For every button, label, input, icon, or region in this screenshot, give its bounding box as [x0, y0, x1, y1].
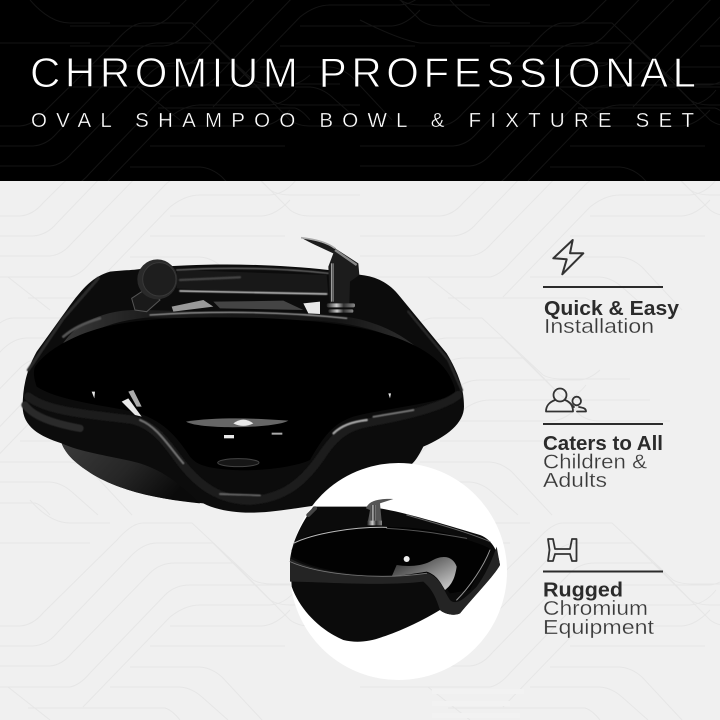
feature: rugged chromium equipment: Equipment: [543, 617, 655, 639]
drain: [218, 459, 259, 467]
faucet: [301, 238, 359, 313]
icon: lightning bolt: [553, 240, 583, 274]
icon: people: [546, 388, 586, 412]
inset rim band: [290, 547, 500, 615]
heading: Caters to All: [543, 433, 663, 455]
feature: caters to all: Adults: [543, 470, 607, 492]
main product: shampoo bowl: [23, 238, 464, 513]
header band: [0, 0, 720, 181]
spray holder knob: [132, 259, 177, 312]
subtitle: OVAL SHAMPOO BOWL & FIXTURE SET: [31, 109, 694, 132]
inset faucet: [366, 499, 393, 525]
feature: caters to all: [543, 388, 663, 492]
feature: quick and easy installation: [543, 240, 680, 338]
title: CHROMIUM PROFESSIONAL: [30, 49, 696, 96]
inset circle with angled bowl view: [290, 463, 507, 680]
rim highlight lines: [25, 268, 462, 501]
basin: [34, 317, 455, 470]
icon: steel beam: [548, 539, 576, 561]
feature: rugged chromium equipment: [543, 539, 663, 639]
reflections: [92, 300, 391, 438]
inset reflection: [392, 557, 457, 590]
deck panels: [58, 310, 428, 358]
inset bowl silhouette: [290, 507, 500, 642]
inset highlights: [290, 508, 490, 600]
description: Children &: [543, 452, 648, 474]
heading: Rugged: [543, 580, 623, 602]
description: Chromium: [543, 598, 648, 620]
heading: Quick & Easy: [544, 298, 680, 320]
description: Installation: [544, 316, 654, 338]
bowl silhouette: [23, 265, 464, 513]
bowl underside: [62, 443, 200, 503]
background panel: [0, 181, 720, 720]
inset basin: [292, 527, 492, 593]
